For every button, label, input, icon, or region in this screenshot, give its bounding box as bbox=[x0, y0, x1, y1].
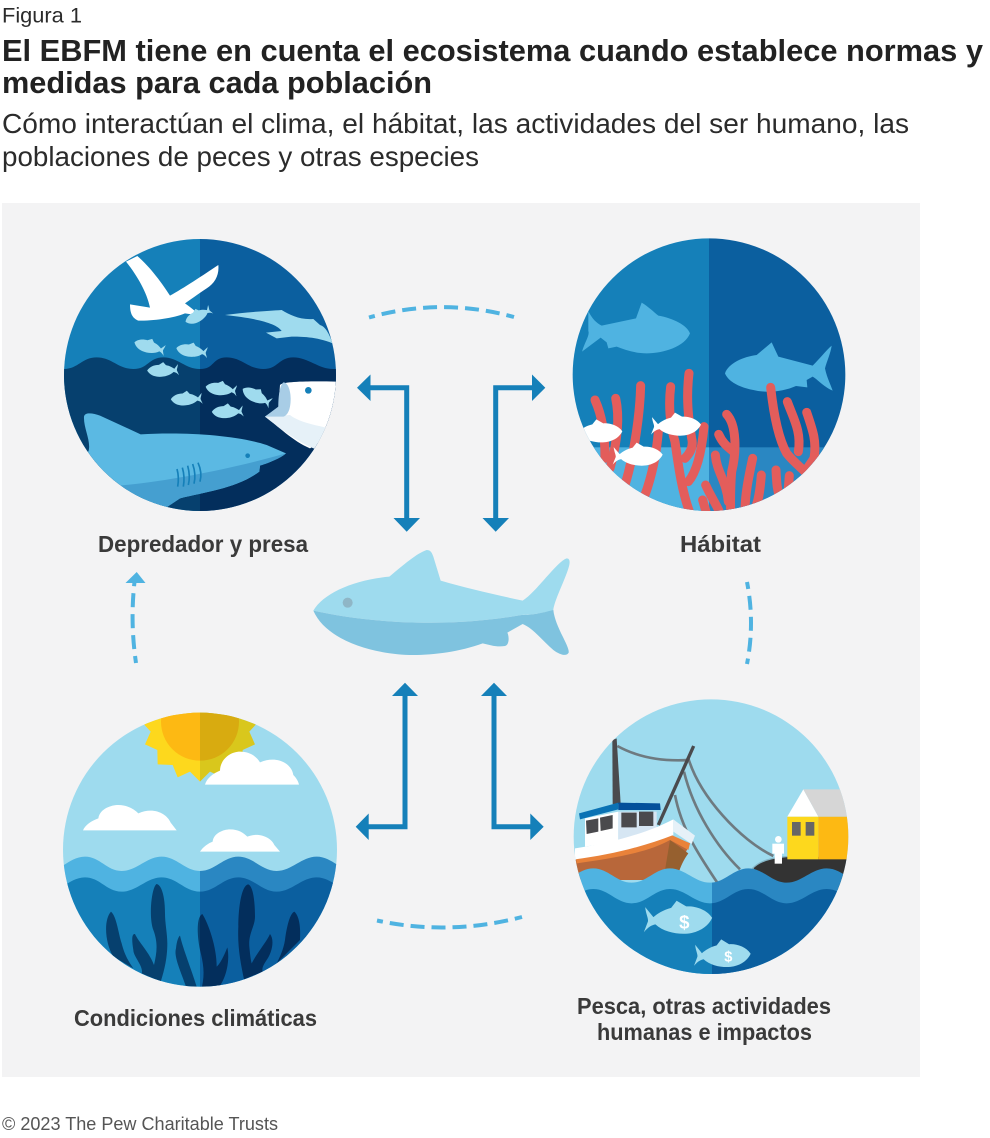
dashed arc: fishing to climate bbox=[377, 917, 522, 927]
copyright footer: © 2023 The Pew Charitable Trusts bbox=[2, 1114, 278, 1134]
arrow: habitat to fish bbox=[482, 374, 545, 532]
waves bbox=[64, 856, 336, 987]
circle: predator and prey bbox=[64, 239, 336, 511]
ropes bbox=[617, 746, 773, 883]
figure number: Figura 1 bbox=[2, 4, 82, 28]
dashed arc: predator to habitat bbox=[369, 307, 514, 318]
label: predator and prey: Depredador y presa bbox=[98, 531, 308, 557]
coral bbox=[595, 373, 815, 515]
circle: habitat bbox=[572, 238, 846, 511]
seabird, white bbox=[126, 256, 218, 321]
subtitle: Cómo interactúan el clima, el hábitat, las actividades del ser humano, las bbox=[2, 108, 909, 139]
arrow: fishing to fish bbox=[481, 683, 544, 840]
arrow: predator and prey to fish bbox=[357, 374, 420, 532]
school of small fish bbox=[133, 303, 275, 419]
house bbox=[787, 789, 850, 859]
fishing boat bbox=[575, 738, 695, 880]
dashed arc: habitat to fishing bbox=[747, 582, 751, 664]
shark, right bbox=[725, 342, 833, 392]
seaweed bbox=[106, 884, 300, 987]
sun bbox=[144, 712, 256, 782]
valuable fish 1 bbox=[644, 901, 712, 934]
label: fishing and human impacts: humanas e impactos bbox=[597, 1019, 812, 1045]
valuable fish 2: $ bbox=[724, 950, 732, 966]
subtitle: poblaciones de peces y otras especies bbox=[2, 141, 479, 172]
label: climate conditions: Condiciones climáticas bbox=[74, 1005, 317, 1031]
panel: diagram background bbox=[2, 203, 920, 1077]
valuable fish 1: $ bbox=[679, 912, 690, 933]
title: El EBFM tiene en cuenta el ecosistema cuando establece normas y bbox=[2, 33, 984, 68]
subtitle bbox=[2, 108, 909, 172]
circle: climate conditions bbox=[63, 712, 337, 987]
shark bbox=[83, 413, 286, 508]
big fish head bbox=[265, 381, 340, 449]
clouds bbox=[83, 752, 299, 852]
shark, left bbox=[582, 303, 690, 353]
circle: fishing and human activities bbox=[574, 699, 848, 974]
title: medidas para cada población bbox=[2, 65, 432, 100]
person bbox=[772, 836, 784, 864]
waves bbox=[578, 868, 844, 974]
label: habitat: Hábitat bbox=[680, 531, 761, 557]
title bbox=[2, 33, 984, 100]
valuable fish 2 bbox=[694, 939, 751, 967]
seabird, distant bbox=[225, 310, 333, 343]
island bbox=[753, 856, 850, 890]
white fish bbox=[572, 413, 701, 466]
label: fishing and human impacts: Pesca, otras actividades bbox=[577, 993, 831, 1019]
dashed arrow: climate to predator bbox=[126, 572, 146, 663]
central fish bbox=[313, 550, 570, 655]
label: fishing and human impacts bbox=[577, 993, 831, 1045]
arrow: climate to fish bbox=[356, 683, 418, 840]
